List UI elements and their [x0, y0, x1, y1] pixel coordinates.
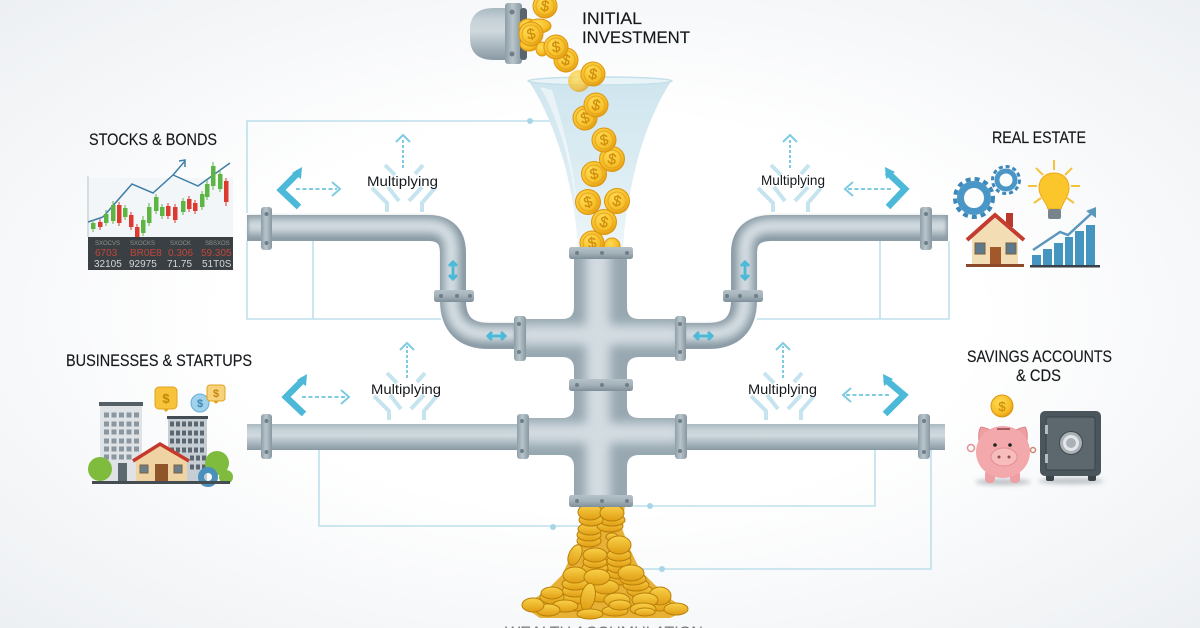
heading: savings accounts and cds: [967, 348, 1112, 385]
coin: $: [606, 150, 618, 169]
table text: 6703: [95, 248, 118, 259]
icon: safe: [1038, 411, 1104, 484]
icon: small dollar bubble: [207, 385, 225, 404]
icon: trees right: [205, 451, 233, 484]
coin: $: [589, 165, 600, 184]
table text: SBSXOS: [205, 241, 230, 247]
icon: house: [966, 213, 1024, 267]
table text: BR0E8: [130, 248, 162, 259]
spout pipe with falling coins: [470, 0, 580, 74]
icon: yellow dollar bubble: $: [162, 391, 170, 406]
heading: savings accounts and cds: & CDS: [1016, 367, 1061, 385]
icon: left tower: [99, 402, 143, 481]
connector lines: [247, 118, 949, 572]
icon: coin: $: [998, 399, 1006, 414]
flange: [569, 379, 633, 391]
flange: [514, 316, 526, 361]
coin: [602, 186, 632, 216]
arrows: upper left: [281, 167, 340, 207]
icon: tree: [88, 457, 112, 481]
coin: [570, 103, 600, 133]
title: initial investment: INVESTMENT: [582, 29, 690, 47]
flange: [675, 316, 686, 361]
icon: double arrows on pipes: [449, 262, 749, 340]
flange: [517, 414, 529, 459]
table text: SXOCK: [170, 241, 191, 247]
icon: right tower: [167, 416, 208, 481]
pipe: upper right branch: [684, 207, 948, 336]
coin: $: [590, 96, 602, 115]
heading: savings accounts and cds: SAVINGS ACCOUNTS: [967, 348, 1112, 366]
icon: large gear: [955, 179, 993, 217]
coin: $: [551, 38, 562, 56]
coin pile: [522, 504, 688, 619]
coin: $: [599, 131, 610, 149]
coin: [598, 145, 626, 173]
table text: [94, 241, 232, 270]
flange: [569, 247, 633, 259]
table text: 71.75: [167, 259, 192, 270]
arrows: lower left: [286, 374, 349, 414]
icon: yellow dollar bubble: [155, 387, 177, 412]
label: multiplying lower left: Multiplying: [371, 381, 441, 397]
coin: $: [598, 213, 610, 232]
icon: piggy bank: [968, 426, 1036, 485]
coin: $: [579, 109, 592, 128]
coin: $: [611, 192, 623, 211]
label: multiplying upper right: [758, 135, 825, 212]
table text: SXOCVS: [95, 241, 120, 247]
heading: businesses and startups: BUSINESSES & STARTUPS: [66, 352, 252, 370]
coin: [580, 160, 608, 188]
arrows: lower right: [843, 374, 904, 414]
coin: $: [587, 234, 598, 252]
icon: growth bars: [1030, 207, 1100, 268]
label: multiplying upper left: Multiplying: [367, 173, 438, 189]
coin: [578, 229, 606, 257]
heading: stocks and bonds: STOCKS & BONDS: [89, 131, 217, 149]
chart: stocks candlesticks: [88, 160, 233, 270]
coin: $: [525, 25, 538, 44]
coin: [582, 91, 610, 119]
table text: 92975: [129, 259, 157, 270]
funnel with coins: [528, 60, 672, 257]
table text: 59.305: [201, 248, 232, 259]
label: multiplying lower left: [371, 343, 441, 420]
coin: $: [582, 193, 595, 212]
coin: [573, 187, 603, 217]
icon: businesses: [88, 385, 233, 484]
label: multiplying upper left: [367, 135, 438, 212]
coin: [568, 70, 590, 92]
icon: house: [133, 444, 189, 483]
label: multiplying lower right: [748, 343, 817, 420]
coin: [590, 126, 618, 154]
label: multiplying lower right: Multiplying: [748, 381, 817, 397]
coin: [579, 60, 607, 88]
coin: [589, 207, 619, 237]
table text: 32105: [94, 259, 122, 270]
title: initial investment: [582, 10, 690, 47]
icon: blue dollar bubble: $: [197, 398, 203, 410]
coin: [604, 238, 620, 254]
icon: small dollar bubble: $: [213, 388, 219, 400]
coin: $: [560, 51, 572, 70]
label: multiplying upper right: Multiplying: [761, 172, 825, 188]
flange: [569, 495, 633, 507]
heading: real estate: REAL ESTATE: [992, 129, 1086, 147]
coin: $: [587, 65, 599, 84]
icon: savings: [968, 395, 1104, 485]
pipe: lower left and right branches: [247, 414, 945, 459]
pipe: upper left branch: [247, 207, 516, 336]
icon: real estate: [955, 160, 1100, 268]
icon: blue dollar bubble: [191, 394, 209, 412]
flange: [675, 414, 687, 459]
arrows: upper right: [845, 167, 905, 207]
table text: 51T0S: [202, 259, 232, 270]
title: initial investment: INITIAL: [582, 10, 642, 28]
table text: 0.306: [168, 248, 193, 259]
icon: light bulb: [1028, 160, 1080, 219]
icon: gear: [201, 470, 215, 484]
central pipe cross: [514, 247, 687, 507]
icon: small gear: [992, 166, 1020, 194]
table text: SXOCKS: [130, 241, 155, 247]
